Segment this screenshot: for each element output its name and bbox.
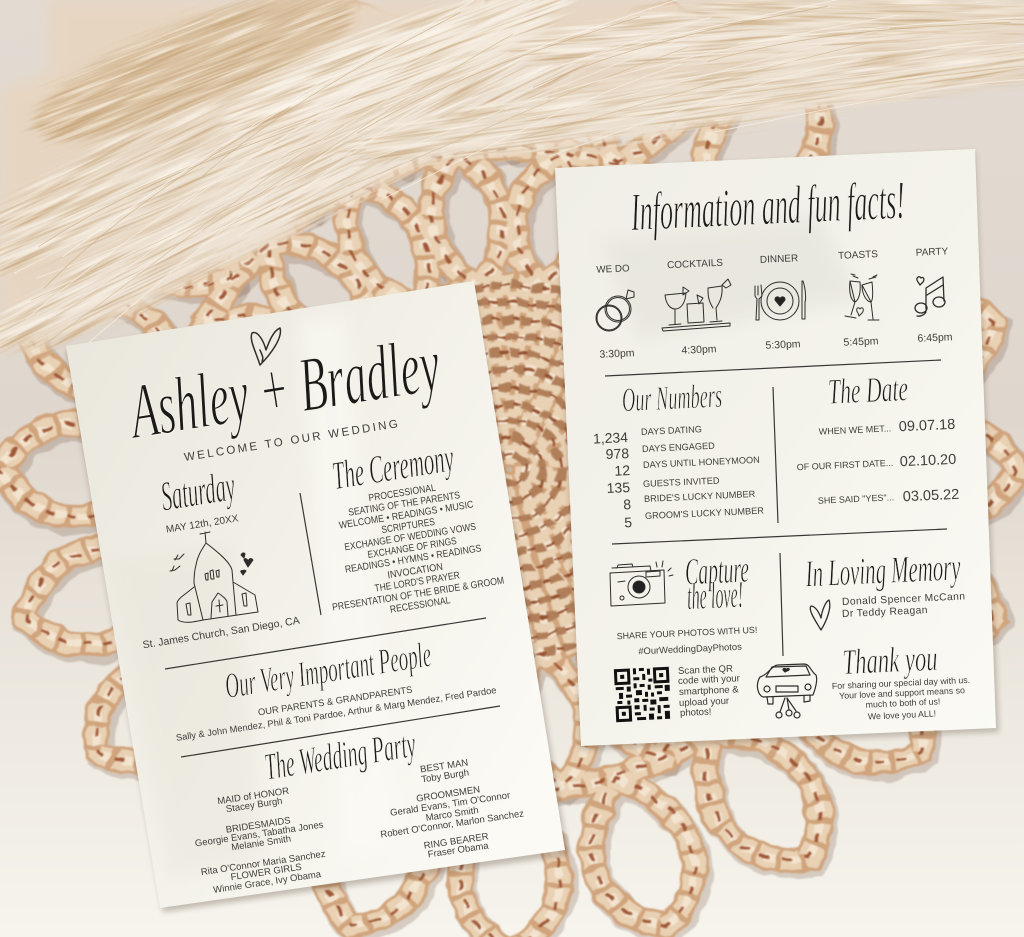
panel: information card — [555, 149, 996, 746]
section: capture the love: Capture — [684, 549, 750, 593]
section: wedding party: Georgie Evans, Tabatha Jones — [194, 819, 324, 850]
section: thank you: We love you ALL! — [868, 708, 936, 722]
we do: 3:30pm — [599, 347, 635, 361]
timeline — [596, 246, 953, 361]
section: ceremony: PRESENTATION OF THE BRIDE & GROOM — [331, 575, 505, 614]
we do — [596, 263, 635, 361]
party — [915, 246, 953, 345]
section: wedding party: Rita O'Connor Maria Sanchez — [200, 849, 327, 878]
section: wedding party: Gerald Evans, Tim O'Connor — [390, 790, 511, 819]
section: wedding party: FLOWER GIRLS — [230, 862, 303, 883]
section: the date: 09.07.18 — [898, 417, 956, 435]
icon: wedding car — [757, 664, 817, 718]
section: wedding party: Robert O'Connor, Marlon Sanchez — [380, 808, 525, 841]
toasts: TOASTS — [838, 249, 878, 262]
section: wedding party: Toby Burgh — [421, 767, 470, 785]
heart doodle — [251, 328, 280, 365]
section: thank you: Thank you — [842, 638, 938, 682]
divider: vertical — [300, 493, 321, 615]
section: ceremony: PROCESSIONAL — [368, 483, 437, 504]
section: the date: WHEN WE MET... — [819, 423, 891, 437]
section: wedding party: BRIDESMAIDS — [225, 815, 291, 836]
section: the date: 03.05.22 — [902, 487, 960, 505]
section: capture the love: SHARE YOUR PHOTOS WITH US! — [616, 625, 758, 641]
section: our numbers: 1,234 — [593, 429, 629, 447]
divider: vertical — [780, 553, 783, 656]
party: PARTY — [916, 246, 949, 259]
section: our numbers: DAYS DATING — [641, 424, 702, 437]
section: ceremony: SCRIPTURES — [381, 517, 436, 536]
section: capture the love: code with your — [678, 673, 741, 687]
section: wedding party: Winnie Grace, Ivy Obama — [213, 869, 323, 896]
qr code — [614, 667, 671, 722]
section: the date: SHE SAID "YES"... — [818, 492, 894, 506]
section: capture the love: Scan the QR — [678, 664, 733, 677]
section: important people — [175, 634, 497, 743]
divider — [612, 529, 947, 544]
section: in loving memory: Dr Teddy Reagan — [842, 605, 928, 620]
section: the date — [796, 368, 960, 506]
dinner: 5:30pm — [765, 338, 801, 352]
section: important people: Sally & John Mendez, Phil & Toni Pardoe, Arthur & Marg Mendez, Fred Pardoe — [175, 685, 497, 743]
section: thank you: much to both of us! — [865, 696, 941, 710]
icon: camera — [610, 561, 673, 606]
section: ceremony: INVOCATION — [387, 562, 444, 581]
cocktails — [662, 258, 731, 357]
section: ceremony: THE LORD'S PRAYER — [374, 570, 461, 595]
section: wedding party: Marco Smith — [425, 805, 479, 824]
section: our numbers: DAYS ENGAGED — [642, 441, 715, 454]
icon: heart — [810, 600, 830, 630]
section: saturday — [158, 463, 239, 536]
pampas grass — [0, 0, 1024, 378]
title: couple names: Ashley + Bradley — [121, 320, 446, 455]
section: wedding party: BEST MAN — [419, 757, 469, 775]
divider — [605, 360, 941, 376]
section: wedding party: MAID of HONOR — [217, 786, 290, 807]
section: important people: Our Very Important People — [222, 634, 434, 706]
section: in loving memory — [804, 547, 966, 630]
section: capture the love: the love! — [686, 574, 744, 618]
section: our numbers: GUESTS INVITED — [643, 476, 720, 489]
section: our numbers: Our Numbers — [621, 378, 723, 419]
section: ceremony: The Ceremony — [329, 435, 457, 498]
section: ceremony: EXCHANGE OF WEDDING VOWS — [344, 522, 477, 553]
section: wedding party: Fraser Obama — [427, 840, 490, 860]
section: ceremony — [329, 435, 505, 616]
section: our numbers: 12 — [614, 462, 631, 479]
section: wedding party — [194, 723, 525, 896]
section: wedding party: RING BEARER — [423, 831, 490, 852]
section: ceremony: READINGS • HYMNS • READINGS — [344, 543, 483, 576]
section: wedding party: The Wedding Party — [262, 723, 419, 789]
section: our numbers: 5 — [624, 514, 633, 530]
we do: WE DO — [596, 263, 630, 276]
section: capture the love: photos! — [680, 707, 712, 719]
divider — [165, 618, 486, 669]
venue: St. James Church, San Diego, CA — [142, 615, 300, 651]
icon: church — [170, 532, 258, 622]
cocktails: COCKTAILS — [667, 258, 724, 271]
section: our numbers — [593, 378, 764, 530]
panel: wedding program card — [66, 281, 565, 908]
toasts: 5:45pm — [843, 335, 879, 349]
section: wedding party: Melanie Smith — [231, 834, 292, 853]
section: capture the love: #OurWeddingDayPhotos — [638, 641, 742, 656]
section: thank you: For sharing our special day with us. — [832, 675, 970, 691]
section: our numbers: 135 — [606, 479, 631, 496]
dinner: DINNER — [760, 253, 798, 266]
card shadows — [66, 152, 999, 912]
section: capture the love: smartphone & — [679, 684, 740, 698]
section: in loving memory: Donald Spencer McCann — [842, 591, 966, 608]
section: our numbers: BRIDE'S LUCKY NUMBER — [644, 489, 756, 504]
section: ceremony: EXCHANGE OF RINGS — [367, 536, 458, 561]
section: capture the love: upload your — [679, 696, 730, 709]
section: wedding party: GROOMSMEN — [416, 784, 481, 805]
section: important people: OUR PARENTS & GRANDPARENTS — [257, 684, 413, 717]
cocktails: 4:30pm — [681, 343, 717, 357]
section: thank you — [832, 638, 970, 722]
toasts — [838, 249, 879, 349]
section: wedding party: Stacey Burgh — [225, 796, 283, 815]
section: ceremony: WELCOME • READINGS • MUSIC — [338, 499, 474, 532]
section: the date: OF OUR FIRST DATE... — [796, 458, 894, 472]
subtitle: WELCOME TO OUR WEDDING — [183, 418, 401, 464]
section: thank you: Your love and support means so — [839, 685, 965, 701]
section: our numbers: 978 — [605, 445, 630, 462]
section: saturday: MAY 12th, 20XX — [165, 513, 239, 536]
section: ceremony: RECESSIONAL — [389, 595, 452, 616]
section: capture the love — [610, 549, 758, 722]
section: our numbers: 8 — [623, 496, 632, 512]
party: 6:45pm — [917, 331, 953, 345]
section: the date: The Date — [827, 368, 909, 412]
section: the date: 02.10.20 — [899, 452, 957, 470]
dinner — [755, 253, 806, 352]
divider — [181, 706, 500, 757]
divider: vertical — [773, 387, 778, 523]
section: ceremony: SEATING OF THE PARENTS — [348, 490, 461, 519]
section: our numbers: GROOM'S LUCKY NUMBER — [645, 506, 764, 521]
section: saturday: Saturday — [158, 463, 238, 521]
section: our numbers: DAYS UNTIL HONEYMOON — [643, 455, 760, 470]
